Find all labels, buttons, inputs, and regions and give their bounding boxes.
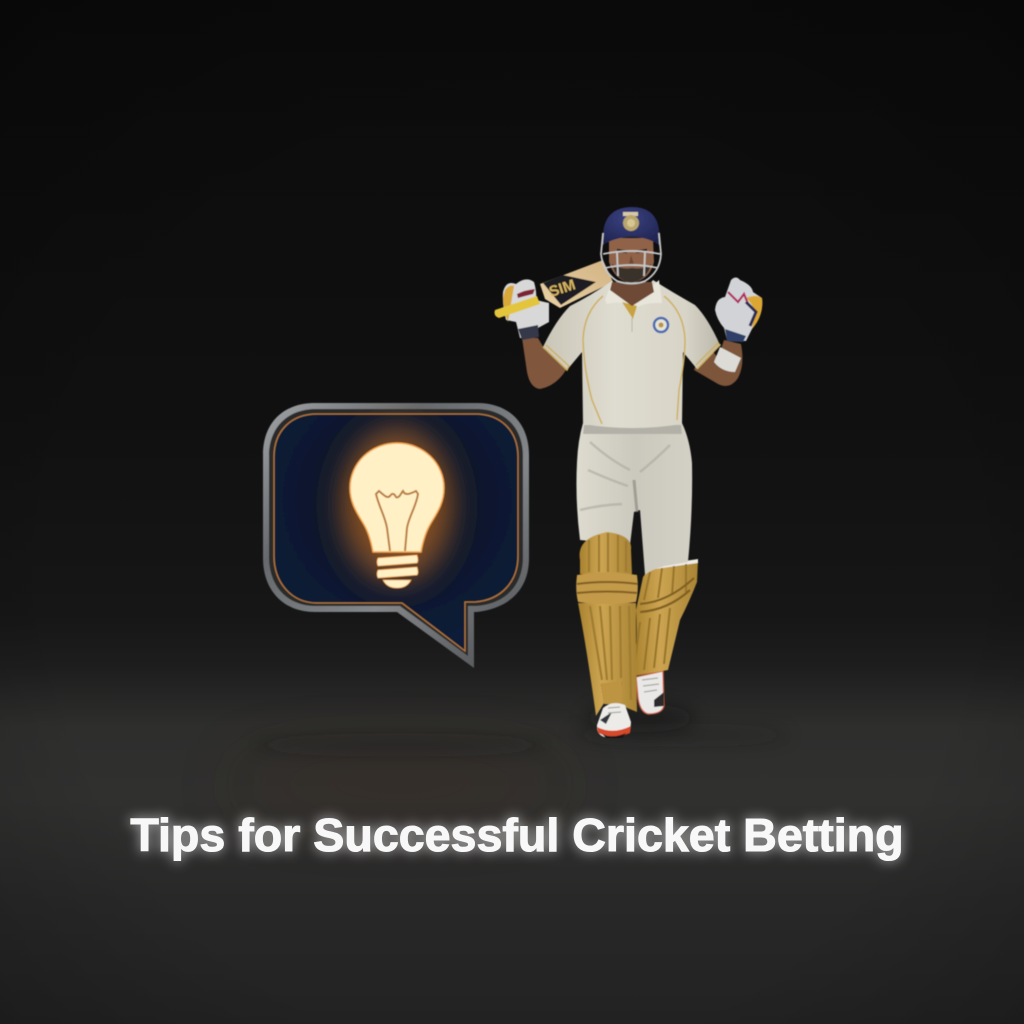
left arm: [522, 338, 566, 389]
beard: [612, 264, 651, 283]
wristband: [714, 347, 741, 372]
bat handle: [494, 296, 540, 318]
front shoe: [597, 703, 631, 738]
title: Tips for Successful Cricket Betting: [130, 809, 904, 861]
bat sticker: SIM: [547, 276, 578, 301]
badge: [654, 318, 668, 332]
bubble panel: [274, 414, 518, 651]
bat blade: [540, 260, 613, 308]
helmet: [603, 207, 659, 245]
title: Tips for Successful Cricket Betting: [130, 809, 904, 861]
back leg pad and shoe: [634, 559, 698, 714]
speech bubble with light bulb: [263, 403, 529, 668]
head: [601, 207, 661, 306]
collar: [605, 280, 662, 318]
right arm: [694, 340, 742, 386]
cricket player: [494, 207, 762, 738]
left glove: [503, 279, 549, 340]
face grille: [601, 233, 661, 284]
bubble inner edge: [269, 409, 523, 656]
shirt piping: [543, 296, 720, 424]
front leg pad: [576, 532, 638, 716]
right glove: [715, 278, 762, 342]
bubble frame: [263, 403, 529, 668]
shirt: [543, 280, 720, 428]
helmet crest: [623, 212, 638, 216]
trousers: [576, 423, 692, 575]
bulb glow: [341, 427, 453, 583]
trouser folds: [580, 425, 682, 512]
icon: light bulb: [350, 443, 444, 588]
